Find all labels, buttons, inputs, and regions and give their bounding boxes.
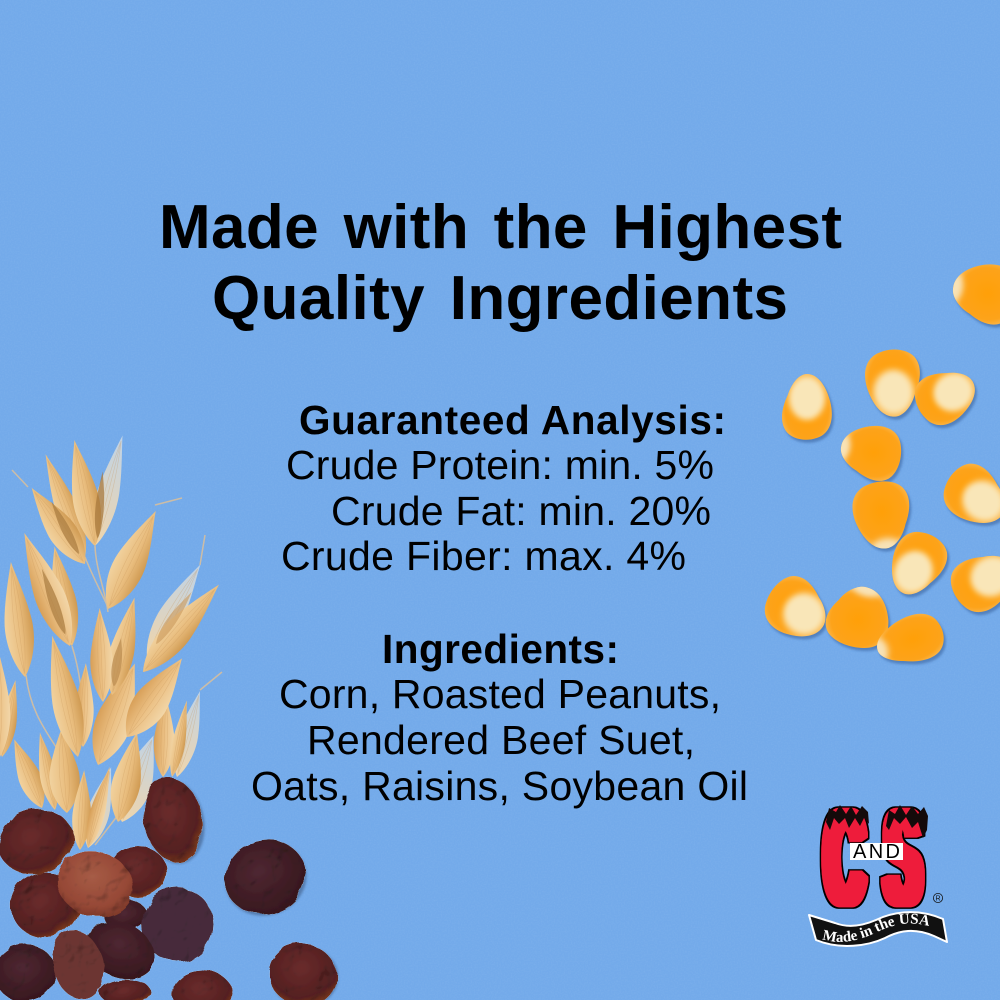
- logo flames: [826, 805, 928, 838]
- logo: made in the USA ribbon: Made in the USA: [822, 914, 929, 942]
- title: [159, 193, 842, 333]
- text block: guaranteed analysis: Crude Protein: min. 5%: [286, 442, 714, 488]
- icon: raisins: [0, 774, 344, 1000]
- text block: guaranteed analysis: Guaranteed Analysis:: [299, 397, 726, 443]
- logo: C and S: S: [885, 782, 921, 933]
- logo: C and S: [808, 782, 948, 947]
- logo: C and S: C: [825, 782, 864, 933]
- icon: corn kernels: [755, 257, 1000, 676]
- text block: guaranteed analysis: [281, 397, 726, 579]
- text block: ingredients: Corn, Roasted Peanuts,: [279, 671, 721, 717]
- raisin cluster: [0, 774, 344, 1000]
- text block: ingredients: [251, 626, 748, 809]
- text block: ingredients: Rendered Beef Suet,: [307, 717, 695, 763]
- text block: guaranteed analysis: Crude Fiber: max. 4%: [281, 533, 686, 579]
- icon: oat sprig: [0, 433, 230, 851]
- text block: ingredients: Ingredients:: [382, 626, 619, 672]
- title: Quality Ingredients: [212, 264, 788, 333]
- text block: ingredients: Oats, Raisins, Soybean Oil: [251, 763, 748, 809]
- logo: AND box: AND: [853, 841, 900, 863]
- logo: registered mark: R: [935, 896, 941, 902]
- text block: guaranteed analysis: Crude Fat: min. 20%: [331, 488, 711, 534]
- title: Made with the Highest: [159, 193, 842, 262]
- logo: registered mark: [933, 893, 943, 903]
